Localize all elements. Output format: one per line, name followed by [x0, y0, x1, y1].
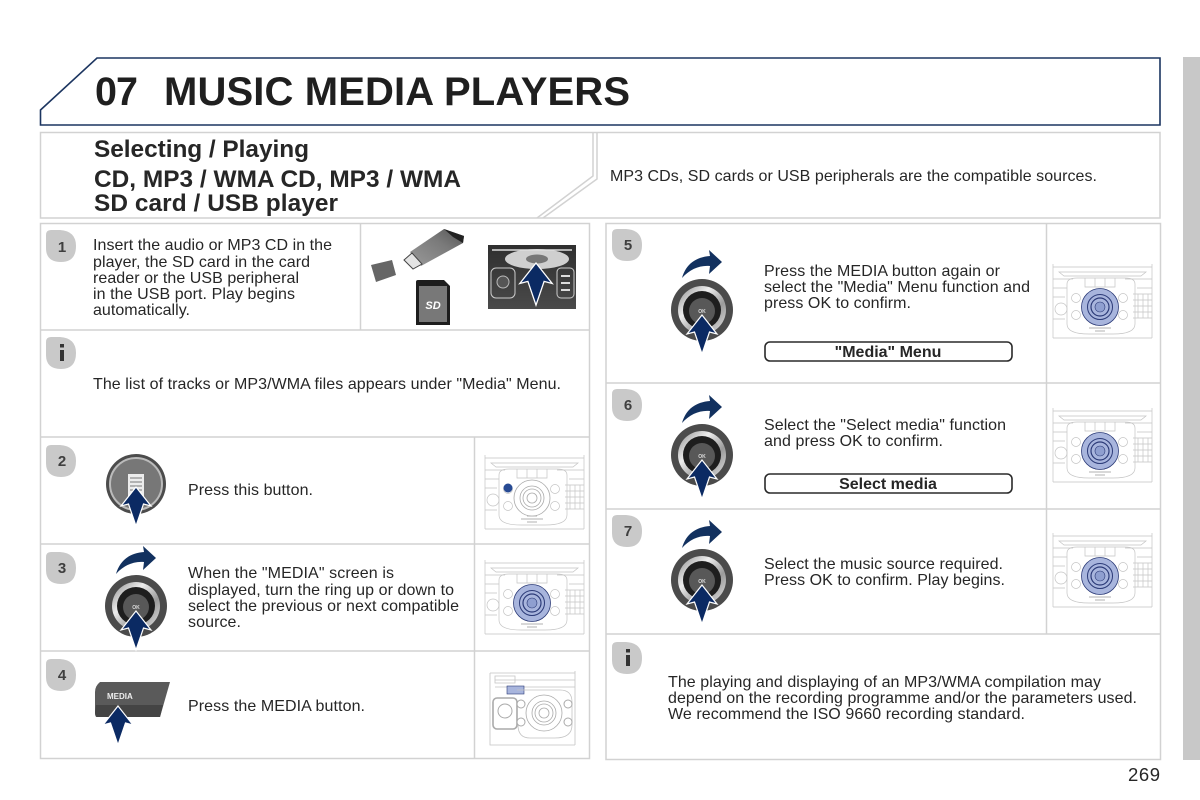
console: ring highlighted [1053, 264, 1152, 338]
icon: ring control with arrows [671, 250, 733, 354]
step 1 text: reader or the USB peripheral [93, 270, 299, 287]
step 1 [46, 229, 576, 325]
panel: section heading [40, 132, 1160, 218]
icon: ring control with arrows: OK [698, 309, 706, 315]
badge 6 [612, 389, 642, 421]
step 5 [612, 229, 1152, 361]
badge 7 [612, 515, 642, 547]
icon: sd card [416, 280, 450, 325]
info note: recording standard [612, 642, 1137, 723]
step 6 text: and press OK to confirm. [764, 433, 943, 450]
badge 5 [612, 229, 642, 261]
info text: We recommend the ISO 9660 recording standard. [668, 706, 1025, 723]
info badge [612, 642, 642, 674]
step 6 [612, 389, 1152, 499]
icon: ring control with arrows [671, 395, 733, 499]
badge 6: 6 [624, 397, 632, 414]
menu label: select media [765, 474, 1012, 493]
step 7 text: Press OK to confirm. Play begins. [764, 572, 1005, 589]
chapter number: 07 [95, 70, 138, 114]
step 1 text: automatically. [93, 302, 190, 319]
heading: selecting / playing: Selecting / Playing [94, 136, 309, 163]
chapter title: MUSIC MEDIA PLAYERS [164, 70, 630, 114]
panel: steps 5 to 7 [606, 223, 1161, 760]
menu label: select media: Select media [839, 476, 937, 493]
step 7 text [764, 556, 1005, 589]
badge 3: 3 [58, 560, 66, 577]
step 7 [612, 515, 1152, 624]
info text: depend on the recording programme and/or the parameters used. [668, 690, 1137, 707]
console: list button highlighted [485, 455, 584, 529]
icon: ring control with arrows: OK [698, 579, 706, 585]
badge 4 [46, 659, 76, 691]
step 3 text: When the "MEDIA" screen is [188, 565, 394, 582]
step 6 text: Select the "Select media" function [764, 417, 1006, 434]
badge 1 [46, 230, 76, 262]
icon: usb stick and cap [371, 229, 464, 282]
step 1 text [93, 237, 332, 319]
badge 1: 1 [58, 239, 66, 256]
info note: track list [46, 337, 561, 393]
info text: The list of tracks or MP3/WMA files appears under "Media" Menu. [93, 376, 561, 393]
step 4 [46, 659, 575, 745]
step 7 text: Select the music source required. [764, 556, 1003, 573]
icon: ring control with arrows [105, 546, 167, 650]
step 3 text: displayed, turn the ring up or down to [188, 582, 454, 599]
badge 2 [46, 445, 76, 477]
step 5 text: select the "Media" Menu function and [764, 279, 1030, 296]
step 3 text: source. [188, 614, 241, 631]
step 5 text [764, 263, 1030, 312]
console: media button highlighted [490, 671, 575, 745]
icon: ring control with arrows [671, 520, 733, 624]
icon: ring control with arrows: OK [132, 605, 140, 611]
side tab bar [1183, 57, 1200, 760]
menu label: media menu [765, 342, 1012, 361]
info text [668, 674, 1137, 723]
step 5 text: press OK to confirm. [764, 295, 911, 312]
heading: media types: CD, MP3 / WMA CD, MP3 / WMA [94, 166, 461, 193]
step 2 [46, 445, 584, 529]
badge 7: 7 [624, 523, 632, 540]
icon: media button with arrow: MEDIA [107, 692, 133, 701]
icon: cd player console [488, 245, 576, 309]
step 6 text [764, 417, 1006, 450]
badge 5: 5 [624, 237, 632, 254]
panel: steps 1 to 4 [40, 223, 590, 759]
icon: media button with arrow [95, 682, 170, 745]
compatible sources note: MP3 CDs, SD cards or USB peripherals are the compatible sources. [610, 168, 1097, 185]
heading: sd card and usb: SD card / USB player [94, 190, 338, 217]
info badge [46, 337, 76, 369]
page number: 269 [1128, 764, 1160, 785]
menu label: media menu: "Media" Menu [835, 344, 941, 361]
console: ring highlighted [1053, 533, 1152, 607]
icon: sd card: SD [425, 300, 441, 312]
step 1 text: Insert the audio or MP3 CD in the [93, 237, 332, 254]
icon: list button with arrow [106, 454, 166, 526]
chapter header [40, 58, 1160, 125]
step 3 text [188, 565, 459, 631]
badge 3 [46, 552, 76, 584]
step 2 text: Press this button. [188, 482, 313, 499]
console: ring highlighted [1053, 408, 1152, 482]
icon: ring control with arrows: OK [698, 454, 706, 460]
step 3 [46, 546, 584, 650]
console: ring highlighted [485, 560, 584, 634]
step 3 text: select the previous or next compatible [188, 598, 459, 615]
step 4 text: Press the MEDIA button. [188, 698, 365, 715]
badge 4: 4 [58, 667, 67, 684]
step 5 text: Press the MEDIA button again or [764, 263, 1001, 280]
info text: The playing and displaying of an MP3/WMA compilation may [668, 674, 1101, 691]
step 1 text: in the USB port. Play begins [93, 286, 295, 303]
step 1 text: player, the SD card in the card [93, 254, 310, 271]
badge 2: 2 [58, 453, 66, 470]
